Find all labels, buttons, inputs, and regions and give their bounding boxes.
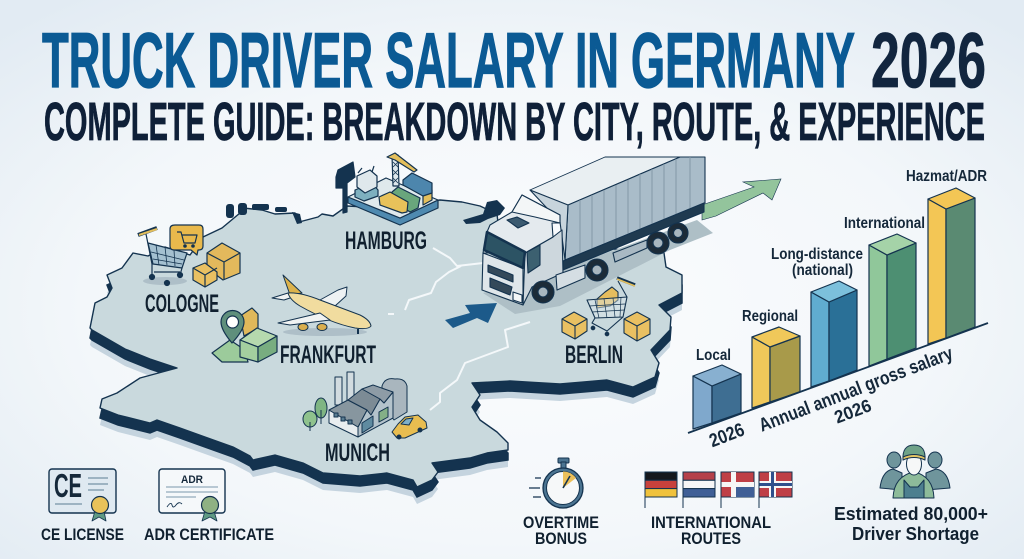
icon: Hamburg port: [336, 153, 438, 225]
flag: Netherlands: [683, 472, 715, 508]
label: overtime bonus: BONUS: [535, 529, 587, 548]
icon: CE license: [49, 467, 116, 521]
icon: Munich factory and car: [303, 372, 427, 439]
icon: drivers group: [880, 445, 950, 498]
bar: Local: [693, 365, 741, 429]
map of Germany: [90, 200, 682, 504]
icon: flags: [645, 472, 792, 508]
icon: stopwatch: [529, 458, 583, 508]
route lines: [388, 248, 530, 410]
chart axis: [688, 323, 988, 433]
chart labels: Regional: [742, 308, 798, 325]
label: ADR certificate: ADR CERTIFICATE: [144, 525, 274, 544]
north coast islands: [226, 200, 505, 224]
label: driver shortage: Driver Shortage: [852, 524, 979, 544]
label: Hamburg: HAMBURG: [345, 227, 427, 255]
cab: [523, 230, 563, 305]
chart labels: Hazmat/ADR: [906, 168, 987, 185]
label: CE license: CE LICENSE: [41, 525, 124, 544]
icon: Cologne shopping cart and boxes: [138, 225, 240, 287]
label: overtime bonus: [523, 513, 599, 548]
arrow: blue route arrow: [445, 303, 497, 328]
wheels: [647, 232, 669, 254]
bar chart: [688, 188, 988, 433]
flag: Germany: [645, 472, 677, 508]
chart labels: [696, 168, 987, 364]
axis label: 2026 second: 2026: [832, 395, 874, 428]
icon: CE license: CE: [54, 467, 82, 504]
flag: Denmark: [721, 472, 754, 508]
axis label: annual gross salary: Annual annual gross salary: [756, 343, 956, 437]
bar: Hazmat/ADR: [928, 188, 975, 344]
label: overtime bonus: OVERTIME: [523, 513, 599, 532]
truck: [482, 157, 713, 314]
arrow: green growth arrow: [702, 179, 781, 220]
icon: ADR certificate: [159, 469, 225, 521]
bar: International: [869, 234, 916, 366]
label: Berlin: BERLIN: [565, 341, 623, 369]
axis label: 2026: 2026: [706, 420, 748, 452]
chassis: [563, 203, 704, 270]
label: Cologne: COLOGNE: [145, 290, 219, 318]
truck shadow: [483, 220, 713, 314]
icon: Frankfurt location pin and green box: [212, 308, 277, 362]
label: Frankfurt: FRANKFURT: [280, 341, 376, 369]
icon: Berlin cart and boxes: [562, 278, 650, 341]
label: international routes: INTERNATIONAL: [651, 513, 771, 532]
chart labels: (national): [792, 262, 853, 279]
flag: Norway: [759, 472, 792, 508]
label: driver shortage: Estimated 80,000+: [834, 504, 988, 524]
bar: Regional: [752, 327, 800, 408]
bar: Long-distance: [811, 281, 857, 387]
chart labels: Local: [696, 347, 731, 364]
label: international routes: ROUTES: [681, 529, 741, 548]
trailer: [530, 157, 680, 205]
label: international routes: [651, 513, 771, 548]
icon: airplane: [272, 275, 371, 336]
label: driver shortage: [834, 504, 988, 544]
chart labels: Long-distance: [771, 246, 863, 263]
label: Munich: MUNICH: [325, 439, 390, 467]
chart labels: International: [844, 215, 925, 232]
icon: ADR certificate: ADR: [181, 474, 203, 486]
